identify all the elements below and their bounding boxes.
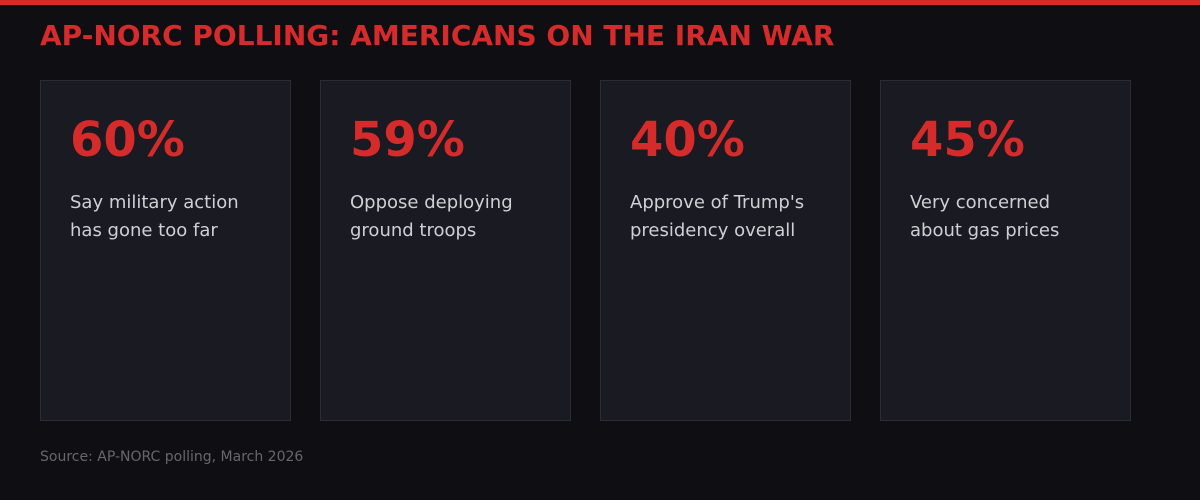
stat label: has gone too far — [70, 220, 218, 241]
title: AP-NORC POLLING: AMERICANS ON THE IRAN WAR — [40, 19, 834, 52]
source note: Source: AP-NORC polling, March 2026 — [40, 449, 303, 465]
panel: ground troops — [320, 80, 571, 421]
stat label — [70, 192, 239, 241]
stat label — [350, 192, 513, 241]
stat number: 60% — [70, 112, 185, 168]
stat number: 40% — [630, 112, 745, 168]
stat label: Approve of Trump's — [630, 192, 804, 213]
stat label: presidency overall — [630, 220, 795, 241]
panel: gas prices — [880, 80, 1131, 421]
stat number: 45% — [910, 112, 1025, 168]
stat label: Say military action — [70, 192, 239, 213]
stat label: Oppose deploying — [350, 192, 513, 213]
stat label: about gas prices — [910, 220, 1059, 241]
panel: approval — [600, 80, 851, 421]
stat label: ground troops — [350, 220, 476, 241]
stat number: 59% — [350, 112, 465, 168]
stat label — [630, 192, 804, 241]
stat label: Very concerned — [910, 192, 1050, 213]
stat label — [910, 192, 1059, 241]
panel: military action — [40, 80, 291, 421]
